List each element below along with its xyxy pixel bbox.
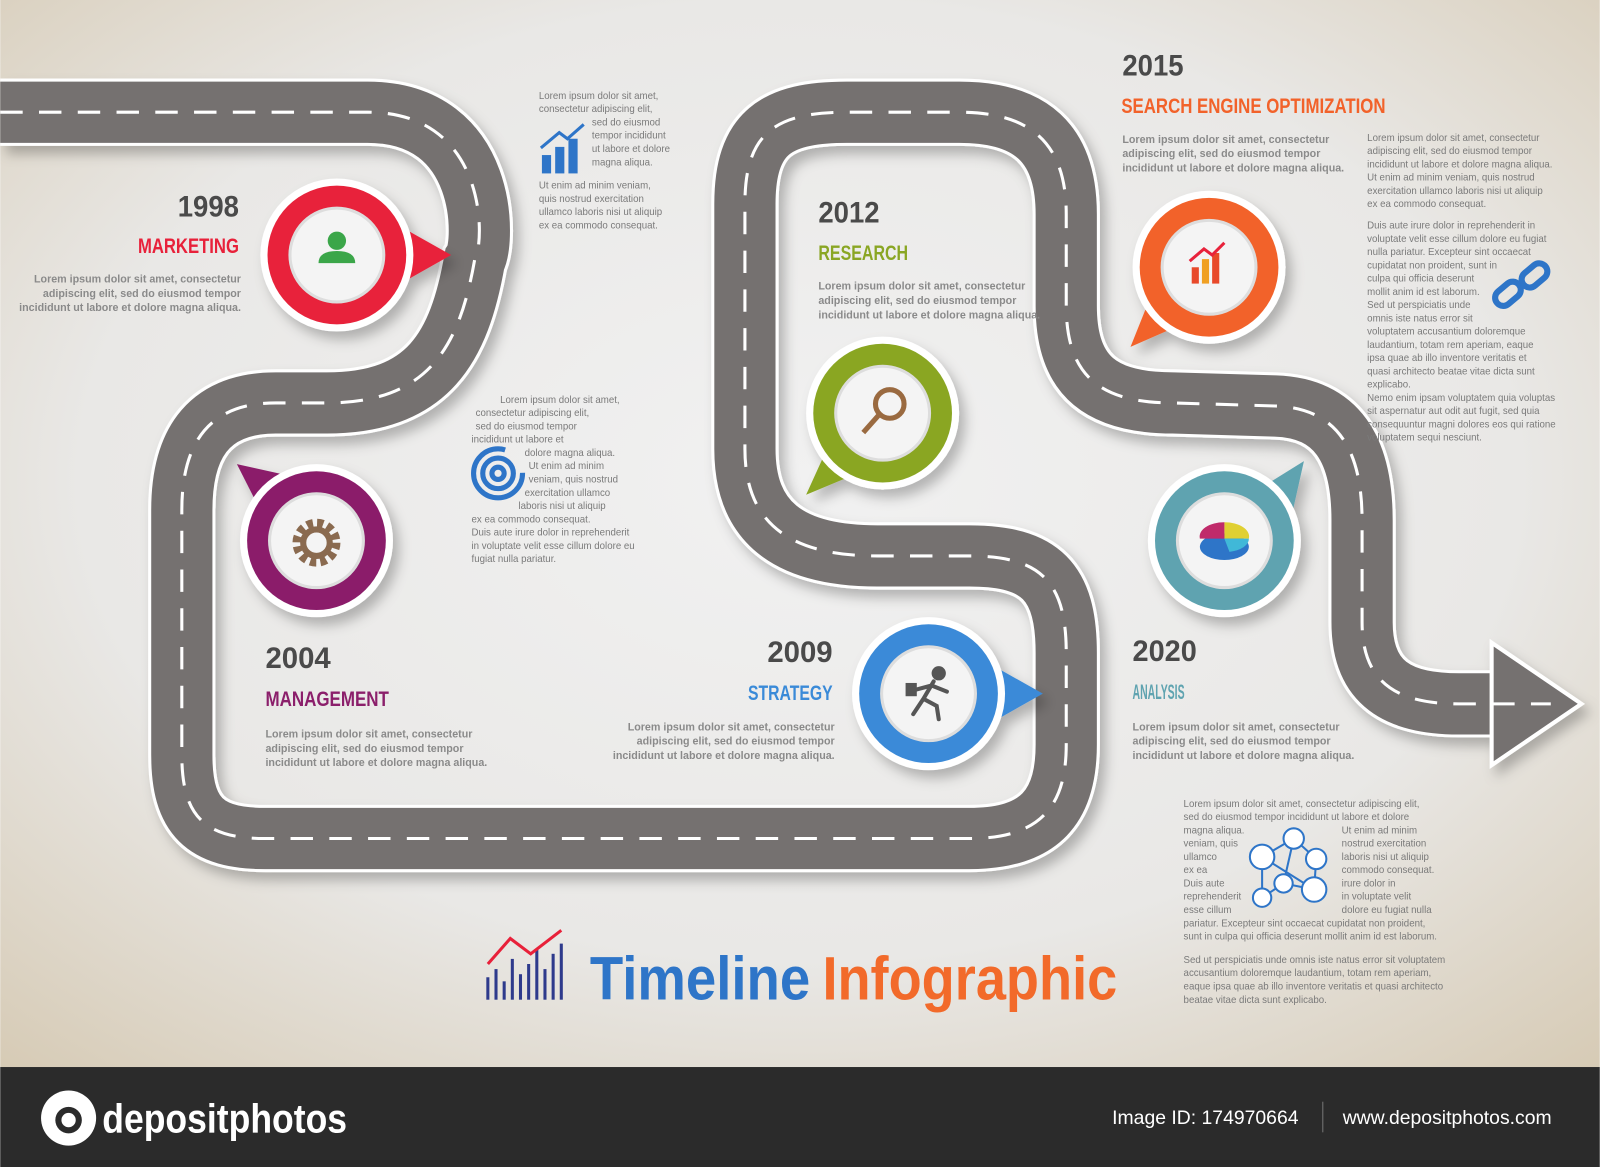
text: 2009 strategy: incididunt ut labore et dolore magna aliqua. (613, 750, 835, 762)
footer bar (0, 1067, 1600, 1167)
text block: right column with link icon: voluptatem accusantium doloremque (1367, 327, 1526, 338)
text: 2012 research: Lorem ipsum dolor sit amet, consectetur (818, 281, 1025, 293)
text block: top middle with chart icon: ex ea commodo consequat. (539, 221, 658, 232)
text block: middle left with radial icon: incididunt ut labore et (472, 435, 564, 446)
text block: right column with link icon: voluptate velit esse cillum dolore eu fugiat (1367, 234, 1547, 245)
text: 1998 marketing: adipiscing elit, sed do eiusmod tempor (43, 288, 241, 300)
icon: chain link (1492, 260, 1551, 309)
text block: right column with link icon: voluptatem sequi nesciunt. (1367, 433, 1482, 444)
text block: right column with link icon: exercitation ullamco laboris nisi ut aliquip (1367, 186, 1543, 197)
text block: bottom right with network icon: ex ea (1184, 865, 1208, 876)
text block: bottom right with network icon: reprehenderit (1184, 892, 1241, 903)
text block: middle left with radial icon: Duis aute irure dolor in reprehenderit (472, 528, 630, 539)
text block: middle left with radial icon: ex ea commodo consequat. (472, 514, 591, 525)
text block: bottom right with network icon: magna aliqua. (1184, 825, 1244, 836)
icon: person (319, 232, 355, 263)
text block: bottom right with network icon: accusantium doloremque laudantium, totam rem aperiam, (1184, 968, 1431, 979)
text block: middle left with radial icon: in voluptate velit esse cillum dolore eu (472, 541, 635, 552)
text block: bottom right with network icon: dolore eu fugiat nulla (1342, 905, 1432, 916)
text block: middle left with radial icon: sed do eiusmod tempor (476, 421, 578, 432)
text block: top middle with chart icon (539, 91, 670, 232)
text block: middle left with radial icon: laboris nisi ut aliquip (518, 501, 606, 512)
text block: middle left with radial icon: Lorem ipsum dolor sit amet, (500, 395, 620, 406)
text: 2012 research: incididunt ut labore et dolore magna aliqua. (818, 309, 1040, 321)
icon: title chart (488, 930, 561, 1000)
text: 2020 analysis: incididunt ut labore et dolore magna aliqua. (1133, 750, 1354, 762)
text block: right column with link icon: Nemo enim ipsam voluptatem quia voluptas (1367, 393, 1555, 404)
text: 2015 seo: Lorem ipsum dolor sit amet, consectetur (1122, 134, 1329, 146)
pin: seo (1131, 191, 1286, 347)
text: 2004 management: incididunt ut labore et dolore magna aliqua. (265, 757, 487, 769)
icon: network (1250, 828, 1326, 907)
text: 2012 research: RESEARCH (818, 241, 908, 265)
text block: top middle with chart icon: ut labore et dolore (592, 144, 670, 155)
text block: right column with link icon (1367, 133, 1556, 444)
text block: bottom right with network icon: sed do eiusmod tempor incididunt ut labore et dolore (1184, 812, 1409, 823)
text: 1998 marketing (19, 190, 241, 314)
text block: bottom right with network icon: irure dolor in (1342, 878, 1396, 889)
text block: right column with link icon: sit aspernatur aut odit aut fugit, sed quia (1367, 406, 1540, 417)
text block: bottom right with network icon: beatae vitae dicta sunt explicabo. (1184, 995, 1327, 1006)
title: Timeline (590, 945, 810, 1013)
text: 2015 seo: SEARCH ENGINE OPTIMIZATION (1121, 94, 1386, 118)
text: 2020 analysis: 2020 (1133, 635, 1197, 668)
text block: top middle with chart icon: Lorem ipsum dolor sit amet, (539, 91, 658, 102)
icon: blue bar chart (541, 124, 584, 173)
text: 2015 seo: adipiscing elit, sed do eiusmod tempor (1122, 148, 1320, 160)
text block: right column with link icon: omnis iste natus error sit (1367, 313, 1473, 324)
pin: analysis (1148, 461, 1304, 617)
text: 2020 analysis: ANALYSIS (1133, 680, 1185, 704)
text block: top middle with chart icon: quis nostrud exercitation (539, 194, 644, 205)
text: 2009 strategy: adipiscing elit, sed do eiusmod tempor (637, 736, 835, 748)
text block: right column with link icon: adipiscing elit, sed do eiusmod tempor (1367, 146, 1533, 157)
text block: bottom right with network icon: laboris nisi ut aliquip (1342, 852, 1429, 863)
text block: middle left with radial icon: fugiat nulla pariatur. (472, 554, 556, 565)
text block: bottom right with network icon: commodo consequat. (1342, 865, 1434, 876)
text block: bottom right with network icon: Duis aute (1184, 878, 1224, 889)
text block: bottom right with network icon: in voluptate velit (1342, 892, 1411, 903)
text: 2004 management: MANAGEMENT (265, 687, 389, 711)
text block: right column with link icon: laudantium, totam rem aperiam, eaque (1367, 340, 1534, 351)
title: Infographic (822, 945, 1117, 1013)
text block: middle left with radial icon: dolore magna aliqua. (525, 448, 615, 459)
text block: middle left with radial icon: exercitation ullamco (525, 488, 610, 499)
text block: top middle with chart icon: consectetur adipiscing elit, (539, 104, 652, 115)
text block: right column with link icon: Lorem ipsum dolor sit amet, consectetur (1367, 133, 1540, 144)
text: 2009 strategy: 2009 (767, 636, 833, 669)
text block: right column with link icon: Duis aute irure dolor in reprehenderit in (1367, 221, 1535, 232)
pin: strategy (852, 617, 1043, 770)
text block: bottom right with network icon: Lorem ipsum dolor sit amet, consectetur adipiscing elit, (1184, 799, 1419, 810)
text block: bottom right with network icon: esse cillum (1184, 905, 1231, 916)
text block: right column with link icon: ex ea commodo consequat. (1367, 199, 1486, 210)
text block: bottom right with network icon: nostrud exercitation (1342, 839, 1426, 850)
icon: magnifier (863, 390, 904, 433)
text: 2020 analysis (1133, 635, 1354, 762)
icon: camera logo (41, 1090, 96, 1146)
text block: bottom right with network icon (1184, 799, 1445, 1006)
text: 2015 seo: incididunt ut labore et dolore magna aliqua. (1122, 162, 1344, 174)
text: 2015 seo (1121, 49, 1386, 174)
text block: bottom right with network icon: ullamco (1184, 852, 1217, 863)
text block: right column with link icon: Sed ut perspiciatis unde (1367, 300, 1471, 311)
text block: top middle with chart icon: ullamco laboris nisi ut aliquip (539, 207, 662, 218)
text block: middle left with radial icon: consectetur adipiscing elit, (476, 408, 589, 419)
text block: right column with link icon: nulla pariatur. Excepteur sint occaecat (1367, 247, 1531, 258)
text block: right column with link icon: incididunt ut labore et dolore magna aliqua. (1367, 159, 1552, 170)
text: 1998 marketing: MARKETING (138, 234, 239, 258)
text: 2004 management: 2004 (265, 642, 331, 675)
icon: gear (297, 523, 336, 562)
text: 1998 marketing: Lorem ipsum dolor sit amet, consectetur (34, 274, 241, 286)
text block: right column with link icon: quasi architecto beatae vitae dicta sunt (1367, 366, 1535, 377)
text block: bottom right with network icon: sunt in culpa qui officia deserunt mollit anim id est laborum. (1184, 932, 1437, 943)
text: 2012 research (818, 196, 1040, 321)
text block: middle left with radial icon: veniam, quis nostrud (529, 475, 618, 486)
text block: top middle with chart icon: sed do eiusmod (592, 117, 660, 128)
text: 2004 management: adipiscing elit, sed do eiusmod tempor (265, 743, 464, 755)
text: 2020 analysis: Lorem ipsum dolor sit amet, consectetur (1133, 721, 1340, 733)
pin: marketing (260, 179, 451, 332)
icon: radial chart (474, 449, 523, 498)
text block: right column with link icon: culpa qui officia deserunt (1367, 274, 1474, 285)
road (0, 112, 1581, 839)
text block: right column with link icon: Ut enim ad minim veniam, quis nostrud (1367, 173, 1535, 184)
icon: pie chart (1200, 522, 1249, 560)
text block: right column with link icon: consequuntur magni dolores eos qui ratione (1367, 419, 1556, 430)
text: 2004 management (265, 642, 487, 769)
pin: research (806, 337, 959, 495)
footer bar: depositphotos (102, 1095, 347, 1141)
text: 2004 management: Lorem ipsum dolor sit amet, consectetur (265, 729, 472, 741)
icon: bar chart up (1190, 243, 1224, 284)
text: 2020 analysis: adipiscing elit, sed do eiusmod tempor (1133, 736, 1331, 748)
text: 2009 strategy: STRATEGY (748, 681, 833, 705)
text block: top middle with chart icon: tempor incididunt (592, 131, 666, 142)
text: 1998 marketing: 1998 (178, 190, 239, 223)
text block: bottom right with network icon: Ut enim ad minim (1342, 825, 1417, 836)
text block: bottom right with network icon: pariatur. Excepteur sint occaecat cupidatat non proident, (1184, 918, 1425, 929)
text block: bottom right with network icon: Sed ut perspiciatis unde omnis iste natus error sit voluptatem (1184, 955, 1445, 966)
text block: bottom right with network icon: eaque ipsa quae ab illo inventore veritatis et quasi architecto (1184, 982, 1443, 993)
text block: right column with link icon: cupidatat non proident, sunt in (1367, 260, 1497, 271)
footer bar: www.depositphotos.com (1342, 1107, 1552, 1129)
title (488, 930, 1117, 1013)
text block: right column with link icon: ipsa quae ab illo inventore veritatis et (1367, 353, 1527, 364)
icon: runner (906, 668, 947, 719)
text: 1998 marketing: incididunt ut labore et dolore magna aliqua. (19, 302, 241, 314)
text: 2009 strategy: Lorem ipsum dolor sit amet, consectetur (628, 721, 835, 733)
text: 2012 research: 2012 (818, 196, 880, 229)
pin: management (237, 464, 393, 617)
text block: right column with link icon: mollit anim id est laborum. (1367, 287, 1480, 298)
text block: top middle with chart icon: Ut enim ad minim veniam, (539, 181, 651, 192)
text block: middle left with radial icon (472, 395, 635, 565)
text block: top middle with chart icon: magna aliqua. (592, 157, 653, 168)
text: 2015 seo: 2015 (1122, 49, 1184, 82)
text block: right column with link icon: explicabo. (1367, 380, 1411, 391)
text: 2012 research: adipiscing elit, sed do eiusmod tempor (818, 295, 1016, 307)
footer bar: Image ID: 174970664 (1112, 1107, 1299, 1129)
text: 2009 strategy (613, 636, 835, 762)
text block: middle left with radial icon: Ut enim ad minim (529, 461, 604, 472)
text block: bottom right with network icon: veniam, quis (1184, 839, 1238, 850)
